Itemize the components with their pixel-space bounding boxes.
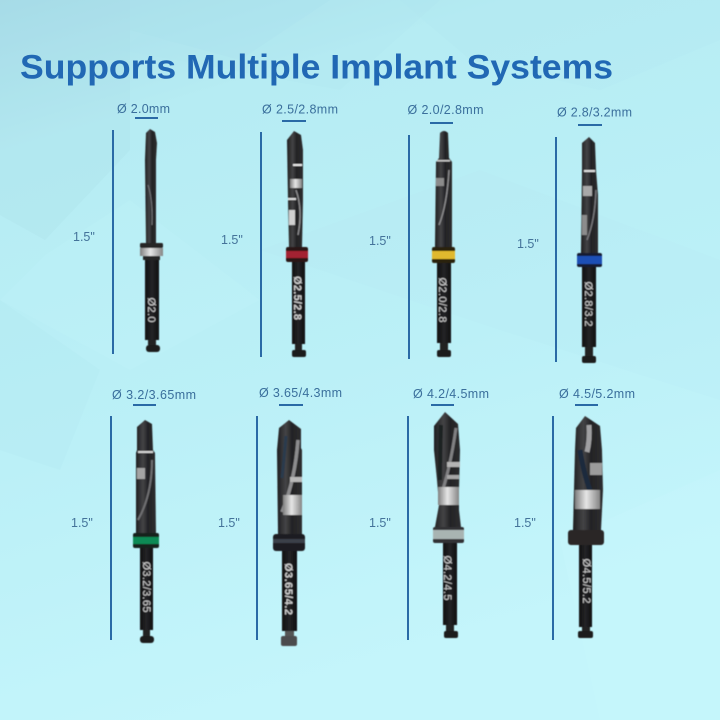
drill item: 3.2/3.65mm [71, 388, 196, 643]
diameter label: Ø 3.65/4.3mm [259, 386, 342, 400]
drill bit [133, 420, 159, 643]
drill item: 2.8/3.2mm [517, 106, 632, 363]
drill bit [140, 129, 163, 352]
length line [260, 132, 262, 357]
length label: 1.5" [71, 516, 93, 530]
title: Supports Multiple Implant Systems [20, 48, 613, 86]
length line [110, 416, 112, 640]
drill item: 2.0mm [73, 102, 170, 354]
length label: 1.5" [517, 237, 539, 251]
diameter tick [431, 404, 454, 406]
length line [555, 137, 557, 362]
diameter label: Ø 4.2/4.5mm [413, 387, 489, 401]
diameter tick [575, 404, 598, 406]
diameter tick [282, 120, 306, 122]
diameter tick [430, 122, 453, 124]
drill item: 2.5/2.8mm [221, 102, 338, 357]
diameter label: Ø 2.0/2.8mm [408, 103, 484, 117]
length label: 1.5" [221, 233, 243, 247]
length line [552, 416, 554, 640]
diameter tick [133, 404, 156, 406]
length label: 1.5" [73, 230, 95, 244]
diameter tick [135, 117, 158, 119]
engraving: Ø2.0/2.8 [436, 278, 448, 322]
drill item: 2.0/2.8mm [369, 103, 484, 359]
engraving: Ø3.2/3.65 [140, 562, 152, 612]
drill bit [568, 416, 604, 638]
diameter label: Ø 2.0mm [117, 102, 170, 116]
drill bit [577, 137, 602, 363]
drill item: 3.65/4.3mm [218, 386, 342, 646]
drill bit [273, 420, 305, 646]
length label: 1.5" [369, 516, 391, 530]
drill item: 4.2/4.5mm [369, 387, 489, 640]
length label: 1.5" [369, 234, 391, 248]
diameter tick [279, 404, 303, 406]
length label: 1.5" [218, 516, 240, 530]
diameter label: Ø 4.5/5.2mm [559, 387, 635, 401]
drill bit [432, 131, 455, 357]
diameter tick [578, 124, 602, 126]
drill item: 4.5/5.2mm [514, 387, 635, 640]
length line [408, 135, 410, 359]
engraving: Ø2.0 [145, 298, 157, 322]
diameter label: Ø 2.8/3.2mm [557, 106, 632, 120]
drill bit [433, 412, 464, 638]
drill bit [286, 131, 308, 357]
engraving: Ø4.2/4.5 [441, 556, 453, 600]
engraving: Ø2.5/2.8 [291, 276, 303, 320]
length line [407, 416, 409, 640]
diameter label: Ø 3.2/3.65mm [112, 388, 196, 402]
length line [112, 130, 114, 354]
engraving: Ø4.5/5.2 [580, 558, 592, 604]
engraving: Ø2.8/3.2 [582, 282, 594, 326]
engraving: Ø3.65/4.2 [282, 563, 294, 615]
length label: 1.5" [514, 516, 536, 530]
length line [256, 416, 258, 640]
diameter label: Ø 2.5/2.8mm [262, 102, 338, 116]
